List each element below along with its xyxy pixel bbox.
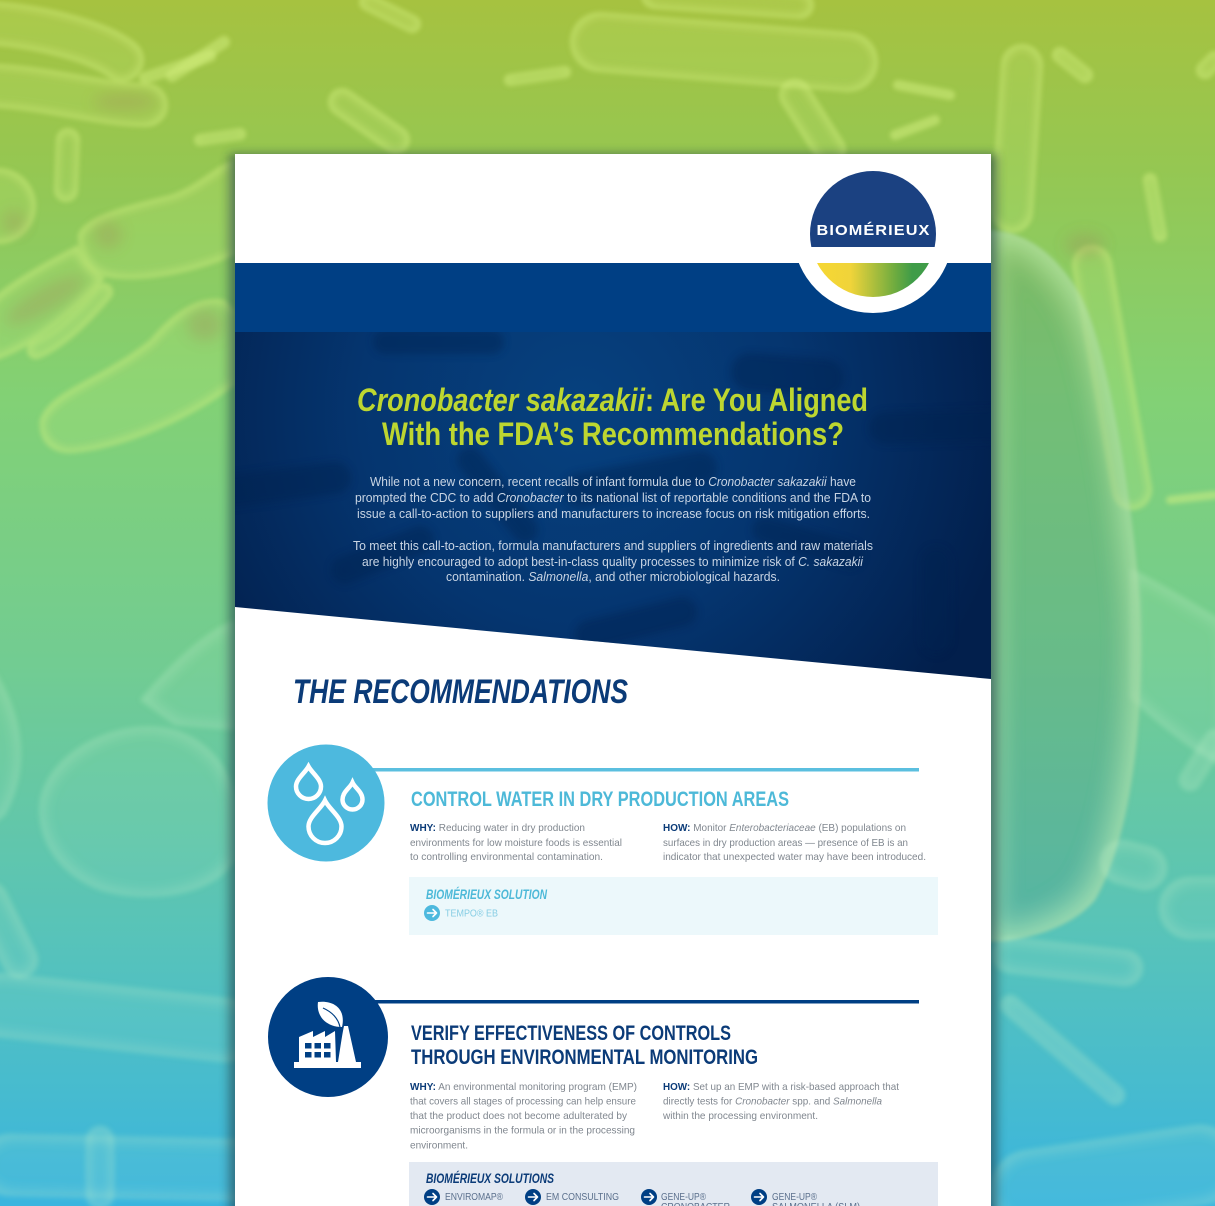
intro paragraph 1 <box>355 475 871 521</box>
why text: environments for low moisture foods is essential <box>410 837 622 849</box>
solution box: TEMPO® EB <box>445 908 498 920</box>
logo: bioMérieux: BIOMÉRIEUX <box>816 222 930 239</box>
title <box>357 382 868 452</box>
intro paragraph 1: While not a new concern, recent recalls of infant formula due to Cronobacter sakazakii have <box>370 475 856 489</box>
solution box <box>409 877 938 935</box>
header band <box>235 263 991 332</box>
panel: recommendation 2, environmental monitoring <box>268 977 938 1206</box>
heading: CONTROL WATER IN DRY PRODUCTION AREAS <box>411 788 789 811</box>
bacteria: lower left cluster <box>0 620 235 1195</box>
solution: EM consulting: EM CONSULTING <box>546 1192 619 1203</box>
panel: recommendation 1, control water <box>268 744 938 935</box>
solution: Enviromap: ENVIROMAP® <box>445 1192 504 1203</box>
intro paragraph 2: To meet this call-to-action, formula manufacturers and suppliers of ingredients and raw materials <box>353 539 873 553</box>
how text: within the processing environment. <box>662 1110 818 1122</box>
why text: WHY: An environmental monitoring program (EMP) <box>410 1081 637 1093</box>
heading: VERIFY EFFECTIVENESS OF CONTROLS <box>411 1022 731 1045</box>
how text: surfaces in dry production areas — presence of EB is an <box>663 837 908 849</box>
intro paragraph 2: are highly encouraged to adopt best-in-class quality processes to minimize risk of C. sakazakii <box>362 555 864 569</box>
intro paragraph 2: contamination. Salmonella, and other microbiological hazards. <box>446 570 780 584</box>
solutions box <box>409 1162 938 1206</box>
panel: document page <box>225 153 1000 1206</box>
title: With the FDA’s Recommendations? <box>382 416 844 452</box>
solution box: BIOMÉRIEUX SOLUTION <box>426 887 547 902</box>
bacteria: top right cluster <box>1012 55 1215 500</box>
why text <box>410 822 622 863</box>
solution: Gene-Up Salmonella <box>751 1189 860 1206</box>
intro paragraph 1: prompted the CDC to add Cronobacter to its national list of reportable conditions and the FDA to <box>355 491 871 505</box>
logo: bioMérieux <box>798 171 948 313</box>
why text: environment. <box>410 1140 468 1152</box>
intro paragraph 2 <box>353 539 873 584</box>
how text: directly tests for Cronobacter spp. and Salmonella <box>663 1096 882 1108</box>
solution: Gene-Up Cronobacter <box>641 1189 730 1206</box>
panel: dark intro banner <box>225 332 1000 679</box>
how text <box>662 1081 899 1122</box>
why text: microorganisms in the formula or in the processing <box>410 1124 635 1136</box>
solution: EM consulting <box>525 1189 619 1205</box>
why text <box>410 1081 637 1152</box>
solution: Gene-Up Salmonella: GENE-UP® <box>772 1192 818 1203</box>
why text: that covers all stages of processing can help ensure <box>410 1096 636 1108</box>
bacteria: top centre cluster <box>342 0 950 150</box>
solutions box: BIOMÉRIEUX SOLUTIONS <box>426 1171 554 1186</box>
how text: HOW: Monitor Enterobacteriaceae (EB) populations on <box>663 822 906 834</box>
bacterium: large right cell <box>985 230 1141 942</box>
why text: that the product does not become adulterated by <box>410 1110 628 1122</box>
why text: WHY: Reducing water in dry production <box>410 822 585 834</box>
heading: the recommendations: THE RECOMMENDATIONS <box>293 673 628 711</box>
bacterium: right arm <box>1130 568 1215 768</box>
intro paragraph 1: issue a call-to-action to suppliers and manufacturers to increase focus on risk mitigation efforts. <box>357 507 870 521</box>
how text <box>663 822 926 863</box>
icon: arrow <box>424 905 440 921</box>
bacteria: top left cluster <box>0 22 240 453</box>
heading: THROUGH ENVIRONMENTAL MONITORING <box>411 1046 758 1069</box>
solution: Enviromap <box>424 1189 504 1205</box>
page shadow <box>229 154 997 1206</box>
icon: factory with leaf <box>268 977 388 1097</box>
bacteria: lower right cluster <box>1010 740 1215 1190</box>
rule <box>375 1000 919 1004</box>
icon: water drops <box>268 744 384 862</box>
why text: to controlling environmental contamination. <box>410 851 603 863</box>
rule <box>372 768 919 772</box>
heading <box>411 1022 758 1069</box>
solution: Gene-Up Cronobacter: GENE-UP® <box>661 1192 707 1203</box>
dark spots inside bacteria <box>0 93 1105 341</box>
dark bacteria in banner <box>225 342 1000 640</box>
how text: indicator that unexpected water may have been introduced. <box>663 851 926 863</box>
how text: HOW: Set up an EMP with a risk-based approach that <box>663 1081 899 1093</box>
title: Cronobacter sakazakii: Are You Aligned <box>357 382 868 418</box>
